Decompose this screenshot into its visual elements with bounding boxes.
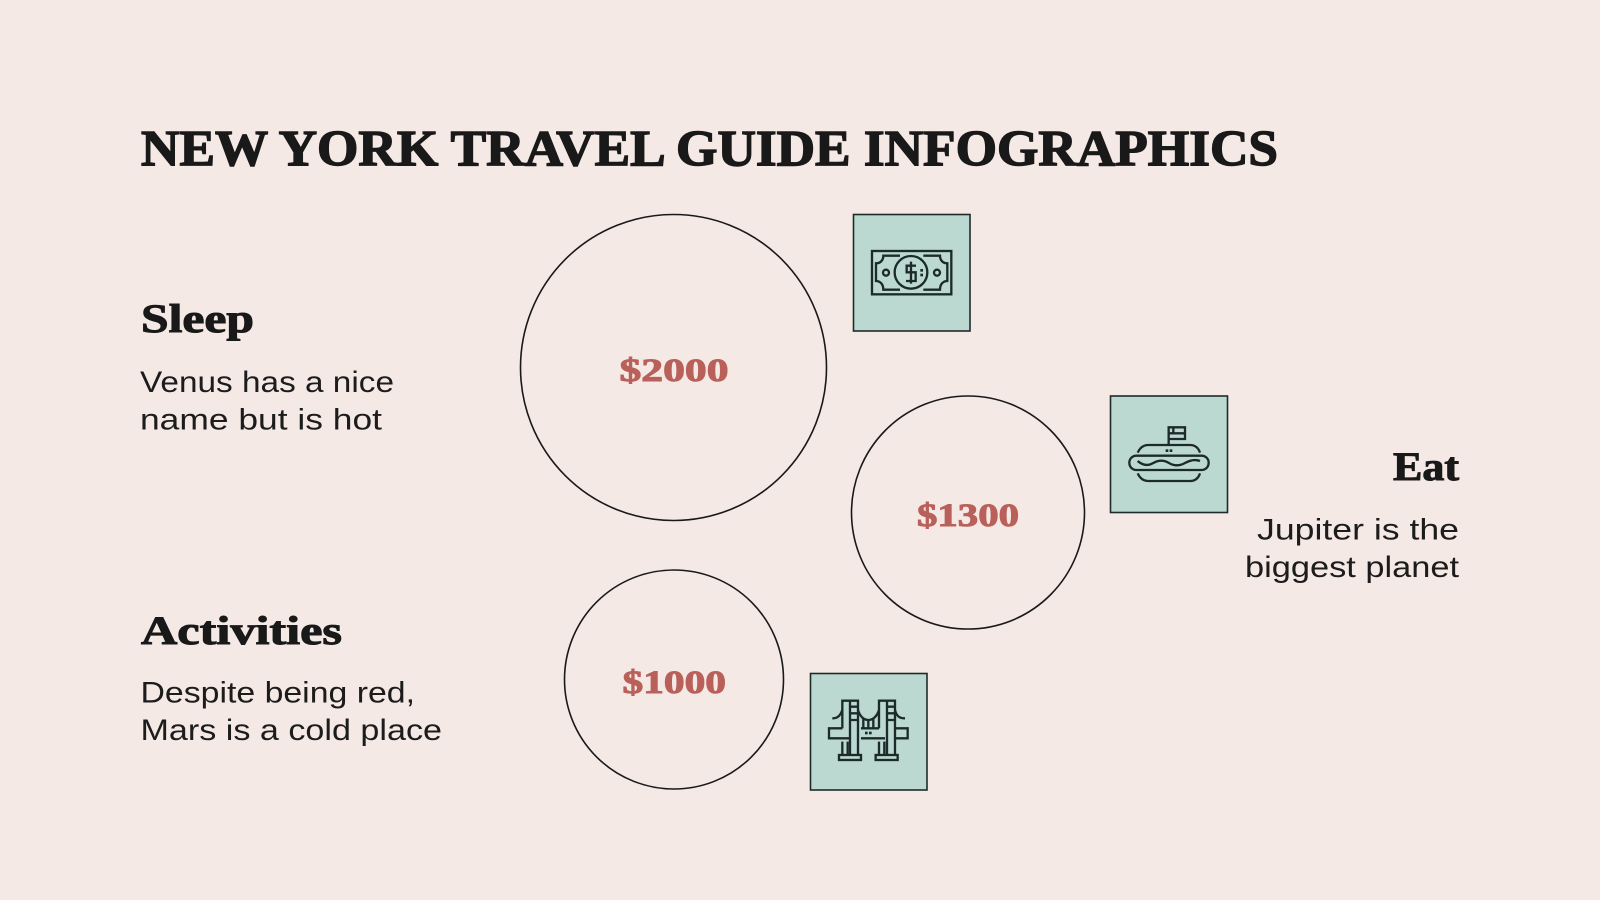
- text block: sleep description: [140, 366, 394, 436]
- heading: activities: Activities: [141, 608, 342, 653]
- panel: sleep text: [140, 296, 394, 436]
- text block: sleep description: Venus has a nice: [140, 366, 394, 399]
- text block: sleep description: name but is hot: [140, 404, 383, 436]
- title: NEW YORK TRAVEL GUIDE INFOGRAPHICS: [141, 122, 1278, 178]
- circle: eat cost: [852, 396, 1084, 629]
- panel: activities text: [140, 608, 442, 747]
- circle: sleep cost: [520, 214, 826, 520]
- icon: hot dog with flag: [1110, 396, 1228, 512]
- icon: dollar bill: [854, 214, 970, 331]
- circle: sleep cost: $2000: [620, 353, 728, 389]
- text block: activities description: Despite being red,: [140, 676, 415, 710]
- panel: eat text: [1245, 444, 1460, 584]
- circle: eat cost: $1300: [917, 498, 1019, 534]
- heading: eat: Eat: [1393, 444, 1460, 489]
- icon: bridge: [810, 674, 927, 790]
- text block: eat description: Jupiter is the: [1257, 514, 1459, 546]
- text block: activities description: [140, 676, 442, 747]
- text block: activities description: Mars is a cold place: [140, 714, 442, 747]
- text block: eat description: biggest planet: [1245, 551, 1460, 584]
- circle: activities cost: $1000: [622, 665, 726, 701]
- heading: sleep: Sleep: [141, 296, 254, 341]
- circle: activities cost: [564, 570, 784, 789]
- text block: eat description: [1245, 514, 1460, 584]
